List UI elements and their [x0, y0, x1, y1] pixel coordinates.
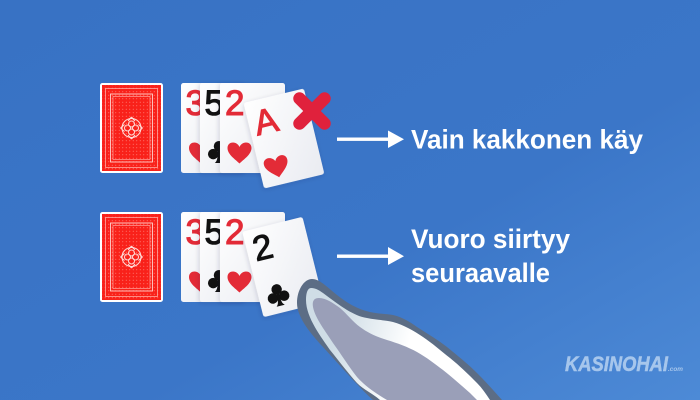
card: 2 of hearts: 2 — [225, 84, 244, 123]
fingernail — [313, 298, 477, 400]
played card: 2 of clubs: 2 — [249, 227, 277, 269]
card: 3 of hearts: 3 — [186, 213, 205, 252]
fingernail rim — [306, 288, 490, 400]
icon: red cross — [300, 98, 324, 124]
played card: ace of hearts: A — [250, 100, 283, 143]
arrow, row 2 — [337, 247, 404, 265]
card: 5 of clubs: 5 — [204, 84, 224, 123]
icon: pointing finger — [297, 279, 502, 400]
label: Vain kakkonen käy: Vain kakkonen käy — [411, 124, 643, 154]
card: 2 of hearts: 2 — [225, 213, 244, 252]
logo: Kasinohai: .com — [668, 367, 684, 373]
card: 5 of clubs: 5 — [204, 213, 224, 252]
card back, row 2 — [100, 212, 163, 302]
arrow, row 1 — [337, 130, 404, 148]
hand of cards, row 2 — [181, 212, 285, 302]
label: Vuoro siirtyy seuraavalle: Vuoro siirtyy — [411, 224, 570, 254]
logo: Kasinohai: KASINOHAI — [565, 353, 669, 376]
played card: ace of hearts — [244, 88, 324, 189]
card: 3 of hearts: 3 — [186, 84, 205, 123]
label: Vuoro siirtyy seuraavalle — [411, 224, 570, 288]
played card: 2 of clubs — [242, 217, 324, 317]
label: Vuoro siirtyy seuraavalle: seuraavalle — [411, 258, 550, 288]
hand of cards, row 1 — [181, 83, 285, 173]
card back, row 1 — [100, 83, 163, 173]
finger outline — [297, 279, 502, 400]
